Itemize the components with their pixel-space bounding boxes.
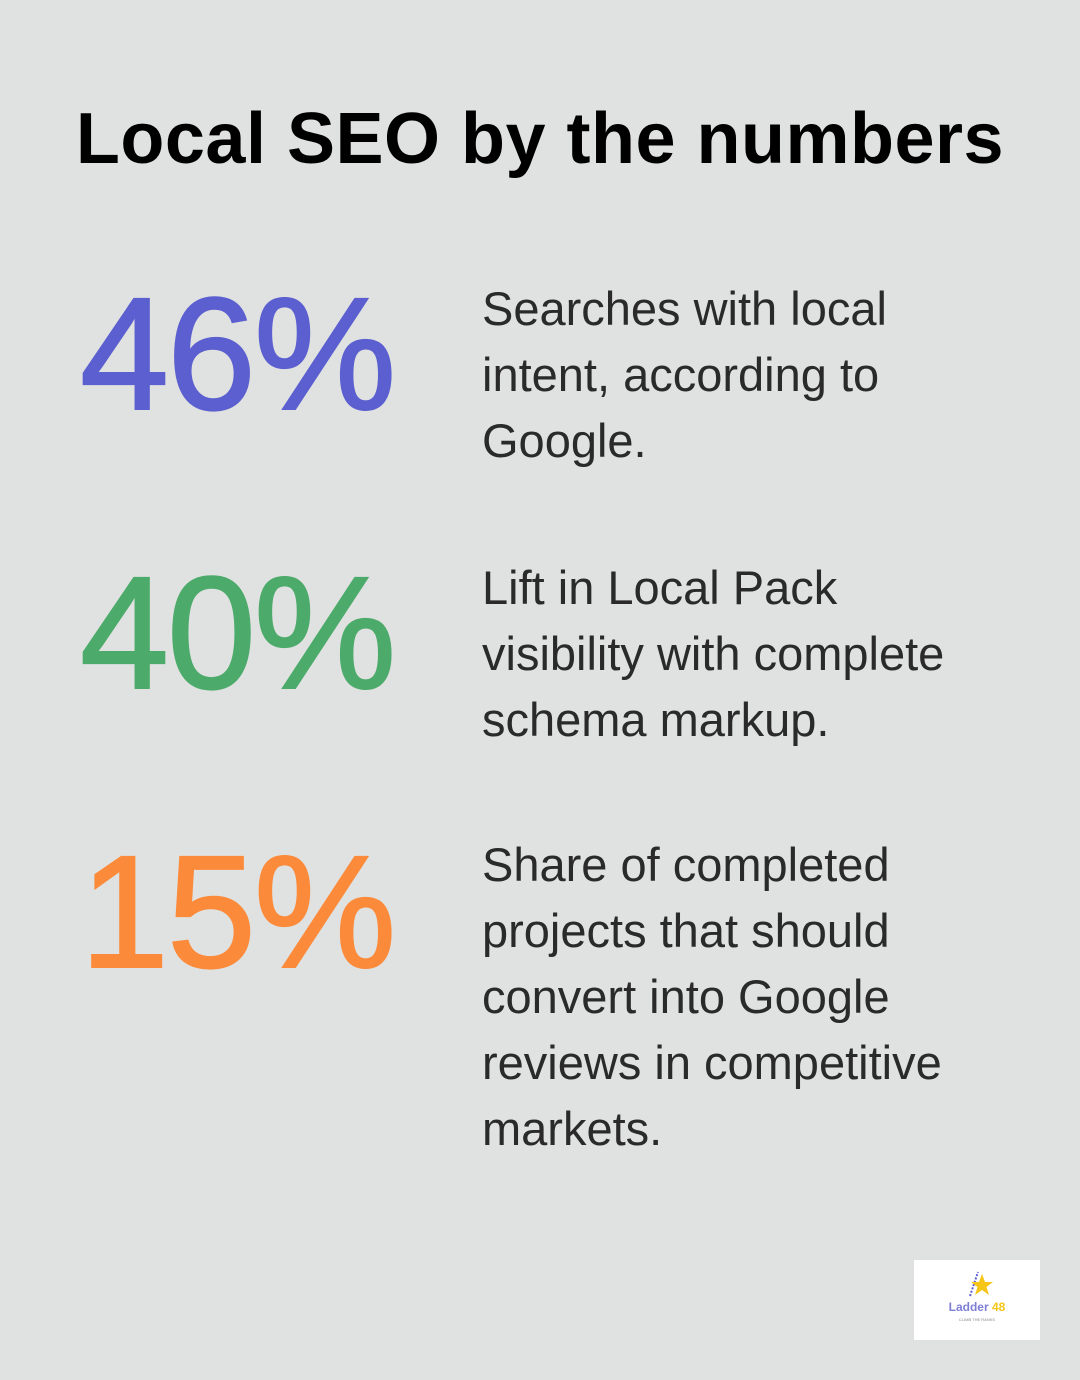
icon: star (969, 1272, 993, 1296)
stat 2 text: visibility with complete (482, 627, 944, 680)
title: Local SEO by the numbers (76, 99, 1004, 179)
stat 2 text: Lift in Local Pack (482, 561, 837, 614)
stat 2 text: schema markup. (482, 693, 829, 746)
logo text: Ladder 48 (949, 1300, 1005, 1314)
stat 1 text: Searches with local (482, 282, 887, 335)
stat 1 number: 46% (80, 264, 394, 443)
stat 1 text: Google. (482, 414, 647, 467)
stat 3 text: Share of completed (482, 838, 890, 891)
stat 3 text: reviews in competitive (482, 1036, 942, 1089)
stat 3 text: markets. (482, 1102, 662, 1155)
stat 3 number: 15% (80, 822, 394, 1001)
stat 3 text: convert into Google (482, 970, 890, 1023)
stat 1 text: intent, according to (482, 348, 879, 401)
stat 2 text (482, 561, 944, 746)
stat 1 text (482, 282, 887, 467)
stat 2 number: 40% (80, 543, 394, 722)
stat 3 text: projects that should (482, 904, 890, 957)
logo (914, 1260, 1040, 1340)
logo: CLIMB THE RANKS (959, 1317, 995, 1322)
stat 3 text (482, 838, 942, 1155)
